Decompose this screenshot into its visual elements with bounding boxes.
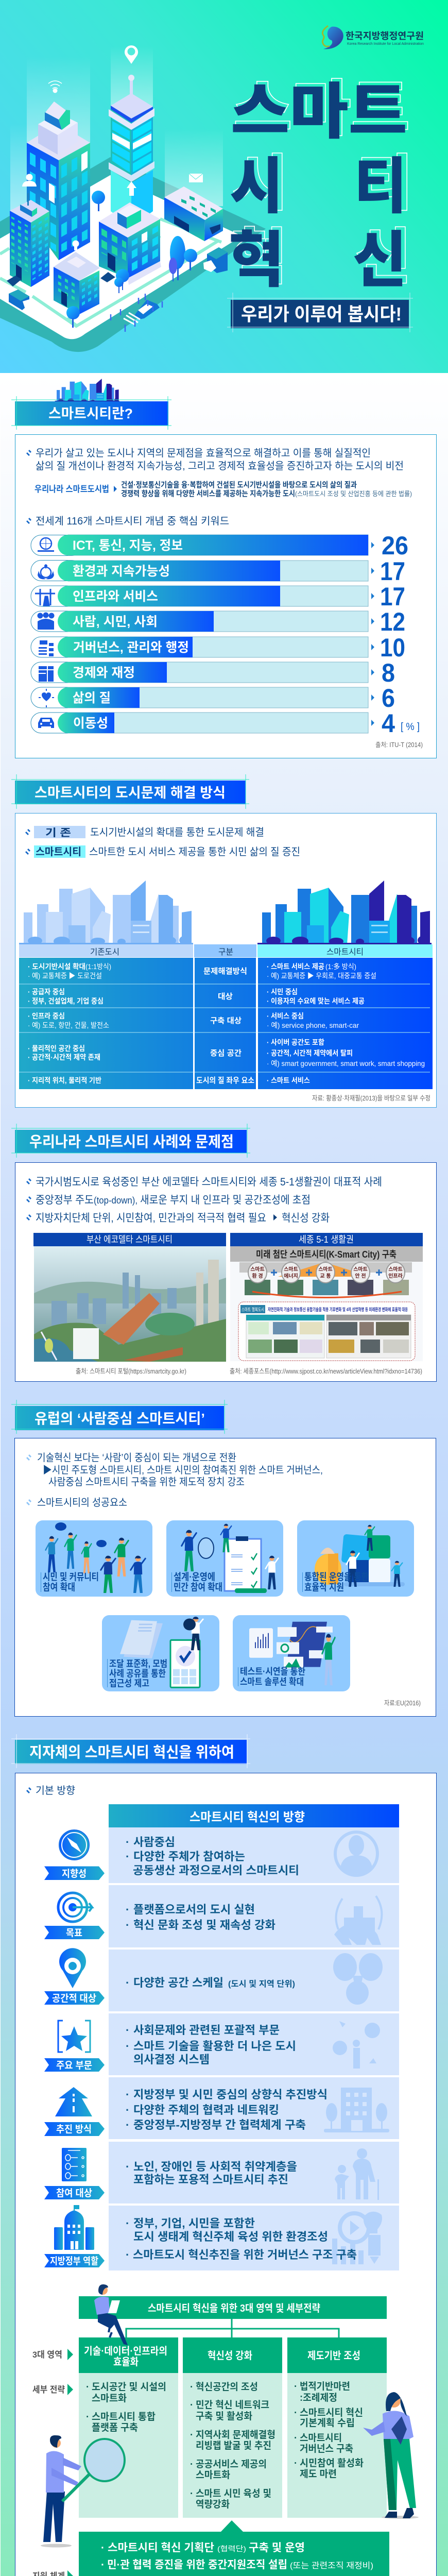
logo: Korea Research Institute for Local Administration bbox=[347, 42, 424, 46]
direction row: 주요 부문: · bbox=[126, 2024, 129, 2037]
case image: Sejong 5-1: 스마트 bbox=[250, 1266, 265, 1273]
direction row: 주요 부문: · bbox=[126, 2040, 129, 2053]
source note: 자료:EU(2016) bbox=[384, 1699, 421, 1707]
direction row: 추진 방식: 추진 방식 bbox=[56, 2124, 92, 2135]
case bullets: 국가시범도시로 육성중인 부산 에코델타 스마트시티와 세종 5-1생활권이 대표적 사례 bbox=[36, 1176, 382, 1188]
case image: Sejong 5-1: 안 전 bbox=[355, 1273, 366, 1279]
card: integrated operation: 효율적 지원 bbox=[304, 1582, 344, 1593]
column: 기술·데이터·인프라의 효율화: 플랫폼 구축 bbox=[92, 2422, 138, 2433]
column: 혁신성 강화: 공공서비스 제공의 bbox=[196, 2459, 267, 2470]
table: category column: 대상 bbox=[218, 992, 233, 1001]
concept text: 스마트시티의 성공요소 bbox=[37, 1497, 127, 1509]
column: 혁신성 강화: 역량강화 bbox=[196, 2499, 230, 2510]
column: 제도기반 조성: 기본계획 수립 bbox=[300, 2417, 355, 2429]
direction row: 지향성: 지향성 bbox=[62, 1868, 87, 1879]
direction row: 공간적 대상 bbox=[44, 1948, 399, 2011]
column: 혁신성 강화: · bbox=[190, 2430, 193, 2441]
logo bbox=[322, 26, 424, 49]
column: 혁신성 강화: · bbox=[190, 2459, 193, 2470]
left low building bbox=[7, 193, 49, 287]
smart city law note: 건설·정보통신기술을 융·복합하여 건설된 도시기반시설을 바탕으로 도시의 삶의 질과 bbox=[121, 481, 357, 489]
card: testing and demonstration bbox=[233, 1615, 350, 1691]
table: existing city column bbox=[28, 962, 111, 1084]
hero banner bbox=[0, 0, 448, 373]
table: smart city column: · 스마트 서비스 제공 bbox=[267, 962, 324, 971]
direction row: 목표: 목표 bbox=[66, 1928, 82, 1939]
direction row: 추진 방식: 중앙정부-지방정부 간 협력체계 구축 bbox=[133, 2119, 306, 2131]
bar chart: keywords: 12 bbox=[380, 607, 405, 636]
table: smart city column: (1:多 방식) bbox=[325, 962, 356, 971]
table: existing city column: (1:1방식) bbox=[85, 962, 111, 971]
hero title: 시 bbox=[230, 153, 283, 221]
section heading: 유럽 사람중심 bbox=[11, 1400, 228, 1434]
bar chart: keywords: 6 bbox=[382, 684, 395, 713]
table: existing city column: · 공간적·시간적 제약 존재 bbox=[28, 1053, 100, 1061]
comparison legend: 스마트시티 bbox=[36, 846, 81, 858]
row labels: 3대 영역 bbox=[32, 2350, 62, 2360]
hero subtitle banner bbox=[227, 293, 413, 332]
column: 제도기반 조성: · bbox=[294, 2381, 297, 2392]
card: procurement standardisation: 조달 표준화, 모범 bbox=[109, 1659, 167, 1669]
bar chart: keywords: 거버넌스, 관리와 행정 bbox=[73, 640, 189, 655]
direction row: 지방정부 역할: · bbox=[126, 2217, 129, 2230]
direction row: 추진 방식: · bbox=[126, 2088, 129, 2101]
direction row: 참여 대상: 참여 대상 bbox=[56, 2188, 92, 2199]
bar chart: keywords: 10 bbox=[380, 633, 405, 662]
case image: Sejong 5-1: 환 경 bbox=[252, 1273, 263, 1279]
card: citizen participation bbox=[36, 1520, 152, 1597]
column: 기술·데이터·인프라의 효율화: 효율화 bbox=[113, 2356, 139, 2368]
section heading: 유럽 사람중심: 유럽의 ‘사람중심 스마트시티’ bbox=[35, 1411, 205, 1427]
card: testing and demonstration: 테스트·시연을 통한 bbox=[240, 1666, 305, 1676]
table: smart city column: · 공간적, 시간적 제약에서 탈피 bbox=[267, 1049, 353, 1057]
definition text: 삶의 질 개선이나 환경적 지속가능성, 그리고 경제적 효율성을 증진하고자 하는 도시의 비전 bbox=[36, 460, 404, 472]
case image: Sejong 5-1 bbox=[230, 1233, 423, 1361]
bar chart: keywords: 삶의 질 bbox=[73, 691, 111, 705]
case image: Sejong 5-1: 스마트 bbox=[353, 1266, 368, 1273]
direction table header bbox=[109, 1804, 399, 1827]
table: smart city column: · 예) 교통체증 ▶ 우회로, 대중교통 증설 bbox=[267, 972, 376, 980]
direction row: 지방정부 역할: · bbox=[126, 2248, 129, 2261]
card: procurement standardisation: 접근성 제고 bbox=[109, 1679, 149, 1689]
city platform illustration bbox=[0, 45, 266, 352]
bar chart: keywords: 사람, 시민, 사회 bbox=[73, 615, 158, 629]
row labels: 세부 전략 bbox=[32, 2385, 65, 2395]
bar chart: keywords: 8 bbox=[382, 658, 395, 687]
column: 혁신성 강화: 스마트화 bbox=[196, 2469, 230, 2481]
direction row: 참여 대상: · bbox=[126, 2160, 129, 2173]
icon: location pin bbox=[125, 45, 138, 64]
direction row: 지향성: · bbox=[126, 1850, 129, 1863]
direction row: 추진 방식: 지방정부 및 시민 중심의 상향식 추진방식 bbox=[133, 2088, 328, 2101]
section heading: 스마트시티란 bbox=[11, 379, 171, 430]
column: 기술·데이터·인프라의 효율화: 도시공간 및 시설의 bbox=[92, 2381, 166, 2393]
case image: Sejong 5-1: 에너지 bbox=[284, 1273, 298, 1279]
direction row: 공간적 대상: 다양한 공간 스케일 bbox=[133, 1976, 223, 1989]
table: smart city column: · 이용자의 수요에 맞는 서비스 제공 bbox=[267, 997, 365, 1005]
smart city law note: 경쟁력 향상을 위해 다양한 서비스를 제공하는 지속가능한 도시 bbox=[121, 489, 295, 498]
direction row: 지방정부 역할: 스마트도시 혁신추진을 위한 거버넌스 구조 구축 bbox=[133, 2248, 357, 2261]
tall rooftop-house building bbox=[27, 101, 90, 260]
smart city law note: 우리나라 스마트도시법 bbox=[35, 484, 109, 494]
table: smart city column: · 시민 중심 bbox=[267, 988, 298, 996]
strategy title bar: 스마트시티 혁신을 위한 3대 영역 및 세부전략 bbox=[148, 2302, 320, 2314]
hero subtitle banner: 우리가 이루어 봅시다! bbox=[241, 303, 402, 325]
direction row: 지방정부 역할: 정부, 기업, 시민을 포함한 bbox=[133, 2217, 255, 2230]
bar chart: keywords: 17 bbox=[380, 582, 405, 611]
direction row: 공간적 대상: (도시 및 지역 단위) bbox=[228, 1979, 295, 1989]
case bullets: 혁신성 강화 bbox=[282, 1212, 330, 1224]
hero title: 혁 bbox=[231, 224, 287, 292]
trees bbox=[66, 191, 197, 328]
direction row: 목표: · bbox=[126, 1903, 129, 1916]
hero title: 혁 bbox=[229, 227, 284, 295]
skyline: smart city bbox=[257, 880, 432, 946]
column: 제도기반 조성: 스마트시티 혁신 bbox=[300, 2407, 363, 2418]
bar chart: keywords: 인프라와 서비스 bbox=[73, 589, 158, 604]
direction row: 추진 방식 bbox=[44, 2077, 399, 2139]
column: 혁신성 강화: 지역사회 문제해결형 bbox=[196, 2429, 275, 2441]
direction row: 주요 부문: 스마트 기술을 활용한 더 나은 도시 bbox=[133, 2040, 296, 2053]
section heading: 도시문제 해결 방식 bbox=[11, 774, 249, 809]
direction row: 지향성: 다양한 주체가 참여하는 bbox=[133, 1850, 245, 1863]
icon: person bbox=[22, 174, 37, 187]
panel: definition and keywords bbox=[15, 435, 437, 758]
trucks and car bbox=[9, 247, 228, 332]
case image: Sejong 5-1: 세종 5-1 생활권 bbox=[299, 1234, 354, 1245]
direction table header: 스마트시티 혁신의 방향 bbox=[189, 1810, 305, 1824]
column: 혁신성 강화: · bbox=[190, 2400, 193, 2411]
hero title bbox=[229, 75, 413, 295]
case image: Sejong 5-1: 스마트 bbox=[284, 1266, 298, 1273]
bar chart: keywords: 경제와 재정 bbox=[73, 666, 135, 680]
bar chart: keywords bbox=[31, 531, 420, 738]
column: 혁신성 강화: 리빙랩 발굴 및 추진 bbox=[196, 2440, 271, 2451]
card: citizen participation: 참여 확대 bbox=[43, 1582, 75, 1593]
column: 기술·데이터·인프라의 효율화 bbox=[79, 2337, 178, 2518]
direction row: 추진 방식: · bbox=[126, 2119, 129, 2131]
tower with antenna bbox=[109, 75, 154, 227]
section heading: 도시문제 해결 방식: 스마트시티의 도시문제 해결 방식 bbox=[35, 785, 226, 801]
direction row: 목표: 플랫폼으로서의 도시 실현 bbox=[133, 1903, 255, 1916]
column: 제도기반 조성: · bbox=[294, 2458, 297, 2469]
direction row: 목표 bbox=[44, 1885, 399, 1947]
row labels bbox=[32, 2349, 73, 2576]
support box with arrow: 구축 및 운영 bbox=[249, 2542, 305, 2554]
table: smart city column bbox=[267, 962, 425, 1084]
keyword chart heading: 전세계 116개 스마트시티 개념 중 핵심 키워드 bbox=[36, 515, 229, 527]
card: private participation: 민간 참여 확대 bbox=[174, 1582, 222, 1593]
table: existing city column: · 도시기반시설 확대 bbox=[28, 962, 85, 971]
table: smart city column: · 스마트 서비스 bbox=[267, 1076, 310, 1084]
support box with arrow: · bbox=[101, 2542, 105, 2554]
hero title: 티 bbox=[357, 150, 413, 218]
case bullets: (top-down), bbox=[94, 1195, 137, 1206]
column: 제도기반 조성: · bbox=[294, 2408, 297, 2418]
bar chart: keywords: 26 bbox=[382, 531, 408, 560]
direction row: 지향성: · bbox=[126, 1836, 129, 1849]
image sources: 출처: 스마트시티 포털(https://smartcity.go.kr) bbox=[76, 1367, 186, 1375]
case bullets: 중앙정부 주도 bbox=[36, 1194, 94, 1206]
table: existing city column: · 지리적 위치, 물리적 기반 bbox=[28, 1076, 101, 1084]
case image: Busan Eco Delta: 부산 에코델타 스마트시티 bbox=[87, 1234, 173, 1245]
section heading: 지자체 혁신 bbox=[11, 1734, 250, 1768]
column: 제도기반 조성: 거버넌스 구축 bbox=[300, 2443, 353, 2454]
column: 제도기반 조성 bbox=[287, 2337, 387, 2518]
card: private participation bbox=[166, 1520, 283, 1597]
hero title: 시 bbox=[232, 150, 288, 218]
front building bbox=[54, 252, 100, 314]
strategy title bar bbox=[79, 2296, 387, 2319]
card: procurement standardisation: 사례 공유를 통한 bbox=[109, 1668, 166, 1679]
warehouse bbox=[164, 187, 223, 241]
direction row: 공간적 대상: · bbox=[126, 1976, 129, 1989]
hero title: 스마트 bbox=[233, 75, 410, 143]
comparison legend: 스마트한 도시 서비스 제공을 통한 시민 삶의 질 증진 bbox=[89, 846, 300, 858]
card: integrated operation bbox=[297, 1520, 414, 1597]
case image: Sejong 5-1: 미래 첨단 스마트시티(K-Smart City) 구축 bbox=[256, 1249, 397, 1260]
column: 혁신성 강화: · bbox=[190, 2488, 193, 2499]
section heading: 사례와 문제점 bbox=[11, 1124, 250, 1158]
direction row: 공간적 대상: 공간적 대상 bbox=[52, 1993, 96, 2004]
section heading: 지자체 혁신: 지자체의 스마트시티 혁신을 위하여 bbox=[29, 1744, 234, 1761]
bar chart: keywords: 4 bbox=[382, 709, 395, 738]
figure: man with magnifier bbox=[41, 2435, 125, 2547]
hero title: 티 bbox=[354, 153, 407, 221]
panel: local government innovation bbox=[15, 1773, 437, 2576]
support box with arrow bbox=[79, 2520, 389, 2576]
hero title: 신 bbox=[355, 224, 411, 292]
case image: Sejong 5-1: 스마트 bbox=[388, 1266, 403, 1273]
direction row: 지방정부 역할: 도시 생태계 혁신주체 육성 위한 환경조성 bbox=[133, 2230, 328, 2243]
concept text: 사람중심 스마트시티 구축을 위한 제도적 장치 강조 bbox=[48, 1476, 245, 1488]
column: 기술·데이터·인프라의 효율화: 기술·데이터·인프라의 bbox=[84, 2345, 167, 2357]
centre building bbox=[99, 202, 161, 285]
column: 제도기반 조성: 시민참여 활성화 bbox=[300, 2458, 364, 2469]
column: 혁신성 강화 bbox=[183, 2337, 282, 2518]
column: 제도기반 조성: · bbox=[294, 2433, 297, 2444]
card: testing and demonstration: 스마트 솔루션 확대 bbox=[240, 1676, 304, 1687]
card: private participation: 설계·운영에 bbox=[174, 1571, 215, 1583]
table: category column bbox=[196, 967, 254, 1085]
table: existing city column: · 인프라 중심 bbox=[28, 1012, 65, 1020]
column: 제도기반 조성: :조례제정 bbox=[300, 2392, 337, 2403]
case image: Sejong 5-1: 인프라 bbox=[388, 1273, 403, 1279]
column: 혁신성 강화: 민간 혁신 네트워크 bbox=[196, 2399, 269, 2411]
bar chart: keywords: [ % ] bbox=[401, 721, 420, 733]
table: category column: 중심 공간 bbox=[210, 1049, 242, 1058]
figure: woman with laptop bbox=[94, 2284, 128, 2345]
card: procurement standardisation bbox=[102, 1615, 219, 1691]
source note: 출처: ITU-T (2014) bbox=[375, 741, 423, 749]
case bullets: 지방자치단체 단위, 시민참여, 민간과의 적극적 협력 필요 bbox=[36, 1212, 266, 1224]
hero title: 신 bbox=[353, 227, 407, 295]
case bullets bbox=[26, 1176, 382, 1224]
bar chart: keywords: 환경과 지속가능성 bbox=[73, 564, 170, 579]
table: existing city column: · 물리적인 공간 중심 bbox=[28, 1044, 85, 1053]
card: integrated operation: 통합된 운영을 통한 bbox=[304, 1571, 369, 1583]
support box with arrow: (또는 관련조직 재정비) bbox=[290, 2561, 373, 2570]
comparison table bbox=[19, 944, 433, 1089]
icon: light bulb bbox=[72, 240, 79, 250]
support box with arrow: 스마트시티 혁신 기획단 bbox=[108, 2542, 214, 2554]
panel: Korean cases bbox=[15, 1162, 437, 1382]
panel: problem solving approach bbox=[15, 813, 437, 1108]
comparison table: 스마트시티 bbox=[326, 947, 364, 957]
column: 기술·데이터·인프라의 효율화: · bbox=[86, 2382, 89, 2393]
image sources bbox=[76, 1367, 422, 1375]
table: existing city column: · 정부, 건설업체, 기업 중심 bbox=[28, 997, 104, 1005]
column: 혁신성 강화: · bbox=[190, 2382, 193, 2393]
comparison legend: 기 존 bbox=[45, 827, 71, 839]
table: existing city column: · 공급자 중심 bbox=[28, 988, 65, 996]
table: existing city column: · 예) 도로, 항만, 건물, 발전소 bbox=[28, 1021, 109, 1029]
source note: 자료: 황종상·차재필(2013)을 바탕으로 일부 수정 bbox=[312, 1094, 430, 1102]
column: 혁신성 강화: 구축 및 활성화 bbox=[196, 2411, 252, 2422]
case image: Sejong 5-1: 교 통 bbox=[320, 1273, 331, 1279]
table: smart city column: · 사이버 공간도 포함 bbox=[267, 1038, 324, 1046]
bar chart: keywords: 17 bbox=[380, 557, 405, 586]
icon: wifi bbox=[48, 81, 62, 93]
direction row: 참여 대상 bbox=[44, 2142, 399, 2204]
direction row: 지향성: 공동생산 과정으로서의 스마트시티 bbox=[133, 1864, 299, 1877]
table: smart city column: · 예) smart government, smart work, smart shopping bbox=[267, 1059, 425, 1067]
bar chart: keywords: ICT, 통신, 지능, 정보 bbox=[73, 538, 183, 553]
direction row: 추진 방식: · bbox=[126, 2104, 129, 2116]
comparison table: 구분 bbox=[218, 948, 233, 957]
concept text: 기술혁신 보다는 ‘사람’이 중심이 되는 개념으로 전환 bbox=[37, 1452, 236, 1464]
table: smart city column: · 서비스 중심 bbox=[267, 1012, 304, 1020]
case image: Sejong 5-1: 스마트 행복도시 bbox=[242, 1307, 264, 1312]
column: 혁신성 강화: 혁신공간의 조성 bbox=[196, 2381, 258, 2393]
comparison legend bbox=[25, 826, 300, 858]
direction row: 참여 대상: 포함하는 포용적 스마트시티 추진 bbox=[133, 2173, 288, 2186]
column: 기술·데이터·인프라의 효율화: 스마트화 bbox=[92, 2393, 127, 2404]
section heading: 사례와 문제점: 우리나라 스마트시티 사례와 문제점 bbox=[29, 1133, 234, 1150]
comparison legend: 도시기반시설의 확대를 통한 도시문제 해결 bbox=[90, 826, 264, 838]
concept text: ▶시민 주도형 스마트시티, 스마트 시민의 참여촉진 위한 스마트 거버넌스, bbox=[43, 1464, 323, 1476]
column: 제도기반 조성: 법적기반마련 bbox=[300, 2381, 350, 2392]
column: 제도기반 조성: 제도 마련 bbox=[300, 2468, 337, 2480]
support box with arrow: · bbox=[101, 2559, 105, 2571]
bar chart: keywords: 이동성 bbox=[73, 716, 108, 731]
definition text: 우리가 살고 있는 도시나 지역의 문제점을 효율적으로 해결하고 이를 통해 실질적인 bbox=[36, 447, 371, 459]
icon: mail bbox=[189, 174, 203, 182]
direction row: 지향성 bbox=[44, 1827, 399, 1883]
table: smart city column: · 예) service phone, smart-car bbox=[267, 1021, 359, 1029]
hero title: 스마트 bbox=[231, 78, 407, 146]
direction row: 주요 부문: 주요 부문 bbox=[56, 2060, 92, 2071]
direction row: 추진 방식: 다양한 주체의 협력과 네트워킹 bbox=[133, 2104, 279, 2116]
direction row: 주요 부문: 사회문제와 관련된 포괄적 부문 bbox=[133, 2024, 280, 2037]
column: 기술·데이터·인프라의 효율화: 스마트시티 통합 bbox=[92, 2411, 156, 2422]
direction row: 지향성: 사람중심 bbox=[133, 1836, 175, 1849]
direction row: 목표: 혁신 문화 조성 및 재속성 강화 bbox=[133, 1919, 275, 1931]
table: category column: 도시의 질 좌우 요소 bbox=[196, 1076, 254, 1085]
panel: Europe people-centred bbox=[14, 1438, 436, 1717]
column: 혁신성 강화: 혁신성 강화 bbox=[208, 2350, 252, 2362]
case bullets: 새로운 부지 내 인프라 및 공간조성에 초점 bbox=[140, 1194, 311, 1206]
skyline: existing city bbox=[19, 880, 193, 946]
case image: Busan Eco Delta bbox=[33, 1233, 226, 1362]
direction row: 주요 부문: 의사결정 시스템 bbox=[133, 2053, 210, 2066]
concept text bbox=[26, 1452, 323, 1509]
smart city law note: (스마트도시 조성 및 산업진흥 등에 관한 법률) bbox=[295, 490, 412, 498]
basic direction heading: 기본 방향 bbox=[36, 1785, 75, 1797]
card: citizen participation: 시민 및 커뮤니티 bbox=[43, 1571, 99, 1583]
strategy diagram bbox=[32, 2284, 419, 2576]
column: 제도기반 조성: 스마트시티 bbox=[300, 2432, 342, 2444]
column: 기술·데이터·인프라의 효율화: · bbox=[86, 2412, 89, 2422]
table: existing city column: · 예) 교통체증 ▶ 도로건설 bbox=[28, 972, 102, 980]
comparison table: 기존도시 bbox=[90, 947, 119, 957]
table: category column: 구축 대상 bbox=[210, 1016, 242, 1025]
direction row: 참여 대상: 노인, 장애인 등 사회적 취약계층을 bbox=[133, 2160, 297, 2173]
column: 제도기반 조성: 제도기반 조성 bbox=[307, 2350, 360, 2362]
definition text bbox=[26, 447, 404, 472]
direction row: 목표: · bbox=[126, 1919, 129, 1931]
section heading: 스마트시티란: 스마트시티란? bbox=[48, 406, 133, 421]
smart city law note bbox=[35, 481, 412, 498]
logo: 한국지방행정연구원 bbox=[346, 31, 424, 41]
support box with arrow: 민·관 협력 증진을 위한 중간지원조직 설립 bbox=[107, 2559, 287, 2571]
case image: Sejong 5-1: 스마트 bbox=[318, 1266, 333, 1273]
direction row: 주요 부문 bbox=[44, 2013, 399, 2075]
direction row: 지방정부 역할: 지방정부 역할 bbox=[50, 2256, 98, 2267]
keyword icons bbox=[35, 538, 55, 728]
table: category column: 문제해결방식 bbox=[203, 967, 247, 976]
direction row: 지방정부 역할 bbox=[44, 2205, 399, 2270]
support box with arrow: (협력단) bbox=[217, 2545, 246, 2553]
figure: woman with folder bbox=[363, 2392, 419, 2519]
column: 혁신성 강화: 스마트 시민 육성 및 bbox=[196, 2488, 271, 2499]
